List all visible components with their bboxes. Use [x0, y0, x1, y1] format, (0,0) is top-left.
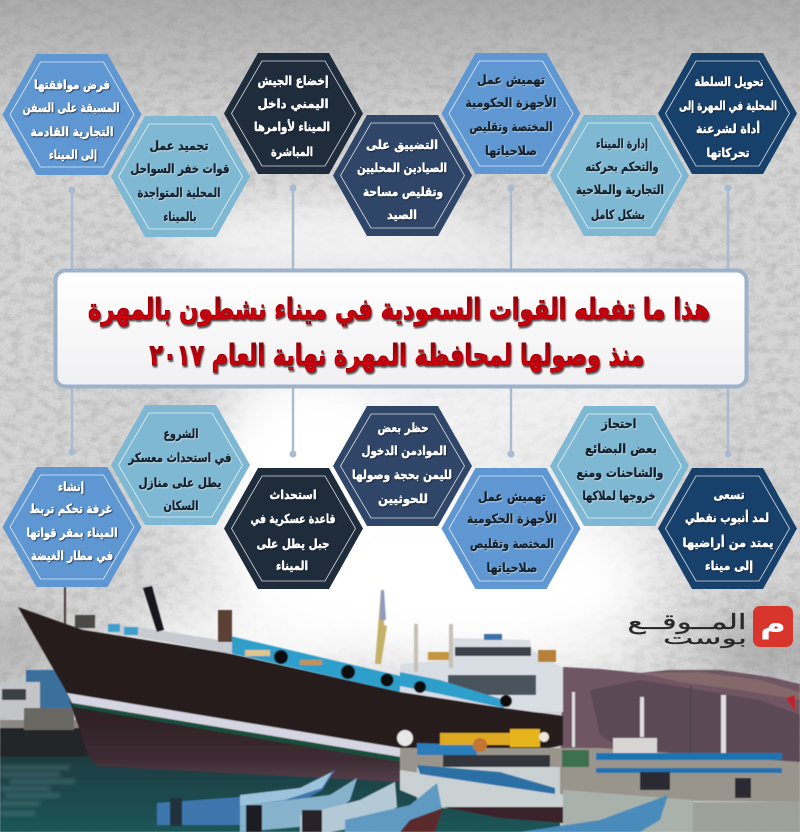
hexagon: top 7 navy blue: تحركاتها [706, 145, 750, 160]
connector lines and dots [68, 184, 732, 458]
hexagon: top 3 dark navy: الميناء لأوامرها [254, 119, 330, 134]
moored boats: white and blue hulls [400, 767, 800, 832]
hexagon: top 3 dark navy: المباشرة [271, 144, 313, 159]
hexagon: bottom 2 blue: في مطار الغيضة [31, 548, 113, 563]
hexagon: bottom 3 dark navy: قاعدة عسكرية في [250, 511, 336, 526]
hexagon: top 2 light blue: قوات خفر السواحل [130, 161, 230, 176]
hexagon: top 6 light blue [550, 115, 689, 236]
hexagon: bottom 4 slate: حظر بعض [378, 420, 428, 435]
hexagon: top 4 slate: وتقليص مساحة [363, 184, 443, 199]
hexagon: bottom 7 navy blue: تسعى [714, 487, 744, 502]
hexagon: top 1 blue: إلى الميناء [49, 147, 97, 162]
hexagon: top 4 slate [333, 115, 472, 236]
hexagon: bottom 1 light blue: السكان [164, 498, 198, 513]
hexagon: bottom 7 navy blue [658, 468, 797, 589]
hexagon: bottom 3 dark navy: جبل يطل على [256, 536, 330, 551]
green stripe [72, 703, 400, 762]
hexagon: top 5 blue: الأجهزة الحكومية [466, 95, 556, 110]
logo: Almawqe Post: بوست [663, 629, 747, 649]
logo icon [753, 606, 793, 647]
hexagon: top 6 light blue: والتحكم بحركته [586, 159, 658, 174]
hexagon: bottom 5 blue: الأجهزة الحكومية [467, 511, 557, 526]
hexagon: top 7 navy blue: تحويل السلطة [694, 74, 764, 89]
hexagon: bottom 7 navy blue: لمد أنبوب نفطي [685, 509, 769, 525]
mountain [560, 667, 800, 775]
hexagon: bottom 6 light blue: خروجها لملاكها [582, 488, 656, 503]
water [0, 757, 560, 832]
hexagon: top 4 slate: الصيد [387, 207, 417, 222]
hexagon: bottom 1 light blue: في استحداث معسكر [128, 450, 232, 465]
hexagon: bottom 2 blue: الميناء بمقر قواتها [26, 525, 118, 540]
quay and truck [0, 722, 92, 757]
hexagon: top 1 blue: التجارية القادمة [30, 124, 114, 139]
hexagon: top 3 dark navy: إخضاع الجيش [258, 73, 328, 88]
hexagon: bottom 5 blue: صلاحياتها [486, 560, 538, 575]
tyres [274, 650, 288, 664]
hexagon: bottom 4 slate: لليمن بحجة وصولها [352, 467, 452, 482]
hexagon: bottom 3 dark navy [224, 468, 363, 589]
white stripe [67, 693, 400, 757]
hexagon: top 7 navy blue: أداة لشرعنة [696, 120, 760, 136]
hexagon: bottom 6 light blue: والشاحنات ومنع [576, 465, 664, 480]
hexagon: top 4 slate: التضييق على [366, 137, 438, 152]
hexagon: bottom 1 light blue [111, 405, 250, 525]
dhow hull [18, 607, 563, 782]
hexagon: top 6 light blue: إدارة الميناء [596, 136, 648, 151]
logo icon: م [760, 609, 786, 640]
hexagon: bottom 5 blue [442, 468, 580, 589]
hexagon: bottom 6 light blue: احتجاز [601, 416, 636, 431]
crane and masts [143, 586, 164, 632]
hexagon: bottom 4 slate [333, 406, 472, 526]
hexagon: bottom 1 light blue: يطل على منازل [138, 475, 222, 490]
hexagon: bottom 3 dark navy: الميناء [276, 558, 308, 573]
hexagon: top 1 blue: المسبقة على السفن [22, 100, 120, 115]
photo: harbour with dhow and boats [0, 586, 800, 832]
hexagon: top 6 light blue: التجارية والملاحية [576, 182, 664, 197]
deck [230, 636, 400, 692]
thin masts on fishing boats [721, 695, 726, 753]
hexagon: top 2 light blue [111, 116, 250, 237]
cargo barrels [397, 729, 589, 767]
hexagon: bottom 2 blue [2, 467, 142, 587]
hexagon: top 2 light blue: بالميناء [164, 209, 196, 224]
hexagon: top 5 blue: تهميش عمل [477, 72, 545, 87]
hexagon: top 7 navy blue [658, 53, 797, 174]
water reflections [0, 766, 75, 815]
hexagon: top 1 blue [2, 54, 142, 175]
hexagon: top 3 dark navy [224, 53, 363, 174]
hexagon: top 3 dark navy: اليمني داخل [258, 96, 328, 111]
hexagon: top 1 blue: فرض موافقتها [34, 77, 110, 92]
hexagon: bottom 7 navy blue: إلى ميناء [705, 558, 753, 573]
hexagon: top 5 blue: صلاحياتها [485, 143, 537, 158]
hexagon: bottom 3 dark navy: استحداث [270, 487, 316, 502]
hexagon: bottom 6 light blue: بعض البضائع [585, 441, 657, 456]
hexagon: bottom 2 blue: غرفة تحكم تربط [30, 501, 112, 516]
hexagon: top 2 light blue: تجميد عمل [150, 138, 208, 153]
title line 2: منذ وصولها لمحافظة المهرة نهاية العام ٢٠١٧ [149, 338, 644, 372]
hexagon: top 6 light blue: بشكل كامل [591, 207, 645, 222]
far ship superstructure [400, 638, 563, 712]
hexagon: bottom 4 slate: الموادمن الدخول [362, 443, 446, 458]
fishing boats [157, 770, 335, 825]
hexagon: top 2 light blue: المحلية المتواجدة [138, 185, 220, 200]
logo wordmark: المــوقــع [628, 610, 746, 634]
hexagon: bottom 1 light blue: الشروع [164, 426, 198, 441]
hexagon: bottom 5 blue: تهميش عمل [478, 489, 546, 504]
logo: Almawqe Post [628, 606, 793, 649]
hexagon: top 5 blue [442, 53, 580, 174]
hexagon: bottom 5 blue: المختصة وتقليص [470, 536, 554, 551]
hexagon: bottom 6 light blue [550, 406, 689, 526]
hexagon: top 5 blue: المختصة وتقليص [470, 119, 552, 134]
title panel [56, 270, 746, 386]
hexagon: bottom 4 slate: للحوثيين [378, 491, 428, 506]
hexagon: bottom 2 blue: إنشاء [58, 479, 84, 494]
hexagon: top 4 slate: الصيادين المحليين [357, 160, 447, 175]
hexagon: bottom 7 navy blue: يمتد من أراضيها [682, 534, 774, 550]
